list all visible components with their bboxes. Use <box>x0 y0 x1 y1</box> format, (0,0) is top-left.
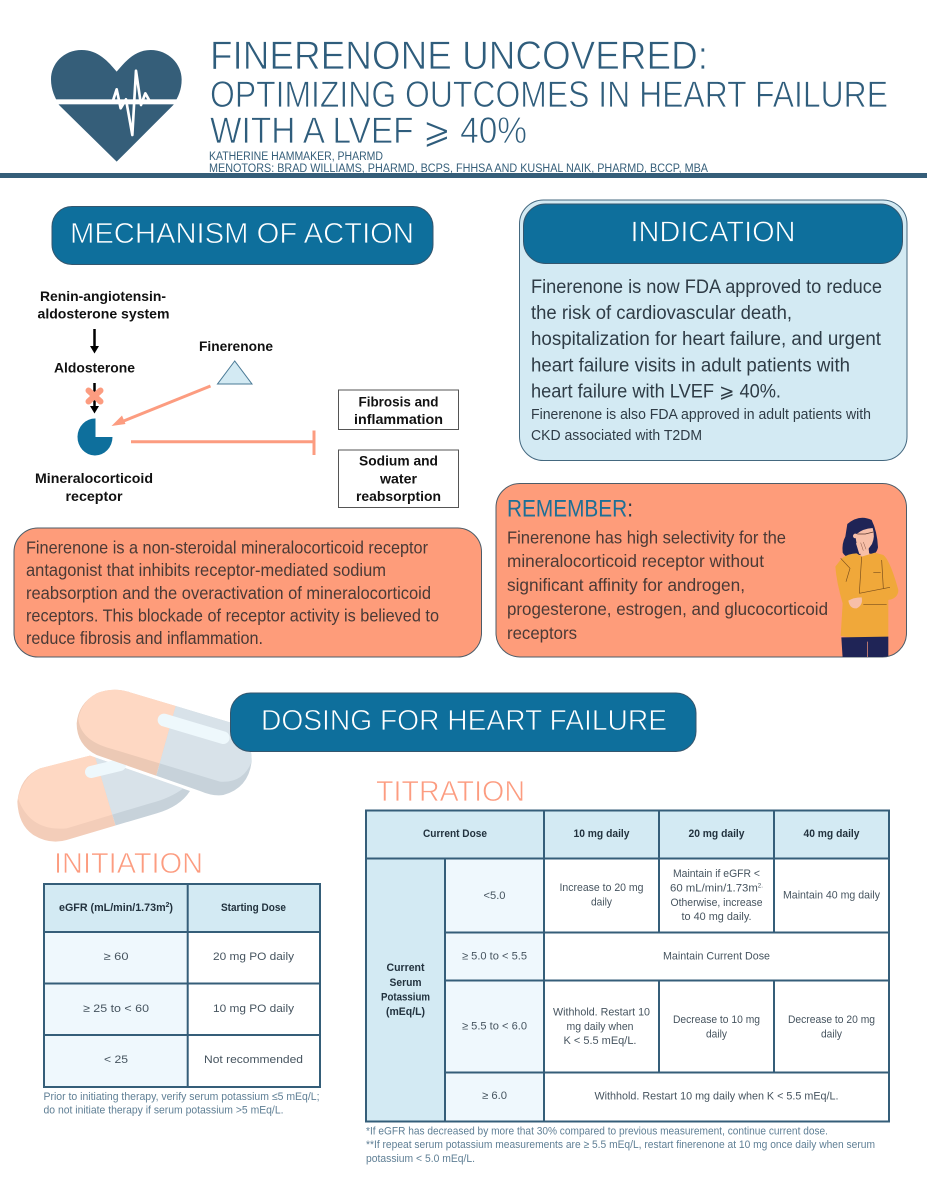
heading: mechanism of action <box>52 206 433 264</box>
indication text: heart failure visits in adult patients with <box>531 356 850 376</box>
panel: mechanism description: reabsorption and the overactivation of mineralocorticoid <box>26 583 431 603</box>
remember text: progesterone, estrogen, and glucocorticoid <box>507 599 828 619</box>
heading: mechanism of action: MECHANISM OF ACTION <box>70 218 414 250</box>
table: titration: 60 mL/min/1.73m <box>670 882 755 894</box>
icon: heart with ECG line <box>50 50 183 162</box>
table: titration: K < 5.5 mEq/L. <box>564 1035 636 1047</box>
table: titration: to 40 mg daily. <box>682 911 752 923</box>
heading: dosing for heart failure <box>230 693 696 752</box>
remember text: receptors <box>507 623 577 643</box>
table: titration: Serum <box>390 977 422 989</box>
remember text: Finerenone has high selectivity for the <box>507 528 786 548</box>
title <box>210 34 888 151</box>
box: sodium and water reabsorption: reabsorption <box>356 488 441 504</box>
icon: finerenone triangle <box>218 361 252 384</box>
mechanism diagram <box>35 288 458 508</box>
note: initiation <box>44 1091 320 1116</box>
note: initiation: do not initiate therapy if serum potassium >5 mEq/L. <box>44 1104 284 1116</box>
remember text <box>507 528 828 643</box>
table: titration: Withhold. Restart 10 <box>553 1006 650 1018</box>
table: initiation: Starting Dose <box>221 902 286 914</box>
table: titration: Potassium <box>381 992 430 1004</box>
table: titration: 40 mg daily <box>804 828 860 840</box>
authors and mentors: KATHERINE HAMMAKER, PHARMD <box>209 151 383 163</box>
panel: mechanism description: antagonist that inhibits receptor-mediated sodium <box>26 560 386 580</box>
table: initiation: < 25 <box>104 1054 128 1066</box>
heading: remember: REMEMBER: <box>507 496 633 522</box>
table: titration: 20 mg daily <box>688 828 745 840</box>
table: titration: 2. <box>758 884 763 890</box>
label: receptor: Mineralocorticoid <box>35 470 153 486</box>
title: FINERENONE UNCOVERED: <box>210 34 708 78</box>
heading: indication: INDICATION <box>630 216 796 248</box>
box: sodium and water reabsorption: water <box>379 470 418 486</box>
table: titration: Maintain Current Dose <box>663 950 770 962</box>
indication text: Finerenone is also FDA approved in adult patients with <box>531 407 871 423</box>
arrow: aldosterone to receptor <box>90 383 99 414</box>
box: fibrosis and inflammation <box>338 390 458 430</box>
table: titration: Decrease to 20 mg <box>788 1014 875 1026</box>
label: RAAS <box>38 288 170 322</box>
table: initiation: 20 mg PO daily <box>213 951 295 963</box>
icon: blocked x mark <box>88 390 100 402</box>
table: initiation: ) <box>169 902 173 914</box>
table: titration: Withhold. Restart 10 mg daily when K < 5.5 mEq/L. <box>594 1090 838 1102</box>
label: aldosterone: Aldosterone <box>54 360 135 376</box>
icon: capsules <box>17 690 252 842</box>
indication text: the risk of cardiovascular death, <box>531 303 792 324</box>
panel: mechanism description: Finerenone is a non-steroidal mineralocorticoid receptor <box>26 538 428 558</box>
table: initiation: 10 mg PO daily <box>213 1003 295 1015</box>
table: initiation: ≥ 25 to < 60 <box>83 1003 149 1015</box>
footnotes: titration <box>366 1126 875 1165</box>
remember text: mineralocorticoid receptor without <box>507 551 764 571</box>
indication text: hospitalization for heart failure, and urgent <box>531 329 882 350</box>
label: finerenone: Finerenone <box>199 338 273 354</box>
title: WITH A LVEF ⩾ 40% <box>210 110 527 151</box>
table: titration: (mEq/L) <box>386 1006 425 1018</box>
table: titration: ≥ 5.5 to < 6.0 <box>462 1020 527 1032</box>
indication text: heart failure with LVEF ⩾ 40%. <box>531 382 781 402</box>
table: titration: Otherwise, increase <box>670 897 762 909</box>
lower capsule <box>17 756 190 842</box>
panel: mechanism description: reduce fibrosis and inflammation. <box>26 628 263 648</box>
indication text: CKD associated with T2DM <box>531 428 702 444</box>
note: initiation: Prior to initiating therapy, verify serum potassium ≤5 mEq/L; <box>44 1091 320 1103</box>
table: titration: 10 mg daily <box>574 828 630 840</box>
heading: initiation: INITIATION <box>54 848 203 880</box>
label: RAAS: Renin-angiotensin- <box>40 288 166 304</box>
table: titration: Current Dose <box>423 828 487 840</box>
table: initiation: ≥ 60 <box>104 951 128 963</box>
table: initiation: 2 <box>166 902 170 909</box>
table: titration: <5.0 <box>484 890 506 902</box>
box: sodium and water reabsorption <box>338 450 458 508</box>
footnotes: titration: potassium < 5.0 mEq/L. <box>366 1153 475 1165</box>
authors and mentors <box>209 151 708 175</box>
footnotes: titration: **If repeat serum potassium measurements are ≥ 5.5 mEq/L, restart finerenone at 10 mg once daily when serum <box>366 1139 875 1151</box>
upper capsule <box>77 690 252 795</box>
panel: mechanism description <box>14 528 482 657</box>
table: titration: daily <box>706 1028 727 1040</box>
label: receptor <box>35 470 153 504</box>
table: titration: mg daily when <box>566 1021 634 1033</box>
panel: mechanism description: receptors. This blockade of receptor activity is believed to <box>26 606 439 626</box>
table: initiation: Not recommended <box>204 1054 303 1066</box>
table: titration: Decrease to 10 mg <box>673 1014 760 1026</box>
inhibition line <box>131 430 314 455</box>
table: initiation: eGFR (mL/min/1.73m <box>59 902 168 914</box>
table: titration: Current <box>386 962 425 974</box>
table: titration: Increase to 20 mg <box>560 882 644 894</box>
arrow: RAAS to aldosterone <box>90 329 99 354</box>
remember text: significant affinity for androgen, <box>507 575 745 595</box>
panel: remember <box>496 484 906 658</box>
table: initiation <box>44 884 320 1087</box>
heading: dosing for heart failure: DOSING FOR HEART FAILURE <box>261 705 667 737</box>
panel: indication <box>520 200 907 460</box>
table: titration: ≥ 6.0 <box>482 1090 507 1102</box>
label: RAAS: aldosterone system <box>38 306 170 322</box>
heading: titration: TITRATION <box>376 776 525 808</box>
icon: mineralocorticoid receptor <box>78 418 112 455</box>
label: receptor: receptor <box>66 488 123 504</box>
box: fibrosis and inflammation: inflammation <box>354 411 443 427</box>
footnotes: titration: *If eGFR has decreased by more that 30% compared to previous measurement, continue current dose. <box>366 1126 828 1138</box>
arrow: finerenone to receptor <box>112 386 210 426</box>
table: titration <box>366 810 889 1122</box>
table: titration: daily <box>821 1028 842 1040</box>
table: titration: ≥ 5.0 to < 5.5 <box>462 950 527 962</box>
indication text <box>531 277 882 444</box>
icon: thinking woman <box>835 518 898 658</box>
table: titration: Maintain 40 mg daily <box>783 890 880 902</box>
indication text: Finerenone is now FDA approved to reduce <box>531 277 882 298</box>
heading: indication <box>524 204 902 264</box>
box: sodium and water reabsorption: Sodium and <box>359 452 438 468</box>
authors and mentors: MENOTORS: BRAD WILLIAMS, PHARMD, BCPS, FHHSA AND KUSHAL NAIK, PHARMD, BCCP, MBA <box>209 163 708 175</box>
box: fibrosis and inflammation: Fibrosis and <box>358 394 438 410</box>
table: titration: daily <box>591 896 612 908</box>
table: titration: Maintain if eGFR < <box>673 868 760 880</box>
